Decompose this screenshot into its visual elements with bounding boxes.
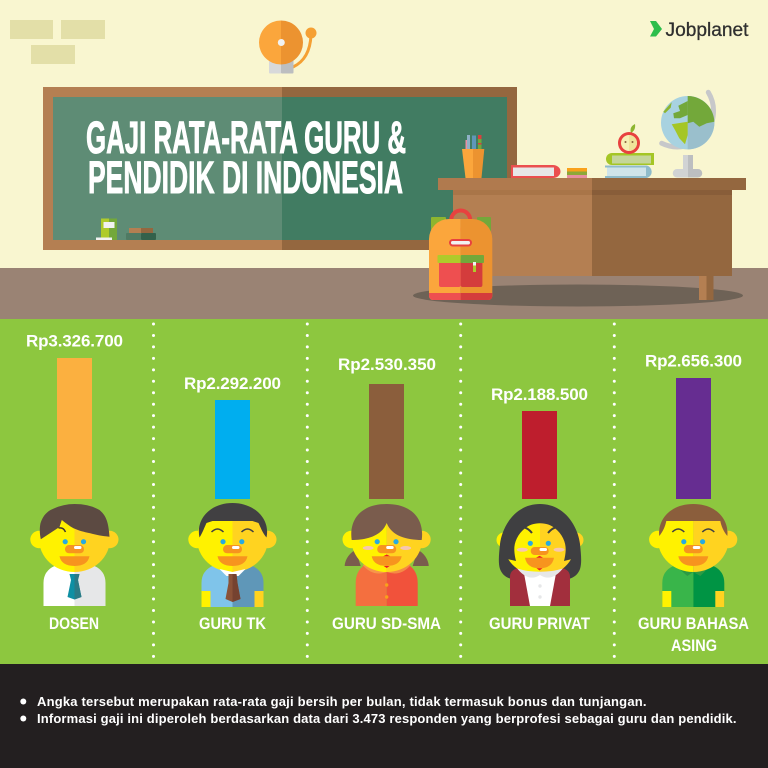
salary value: Rp3.326.700 [26,332,123,351]
salary value: Rp2.530.350 [338,355,436,374]
icon: school bell [259,20,316,74]
icon: chalk box [96,218,117,240]
bullet list: Informasi gaji ini diperoleh berdasarkan data dari 3.473 responden yang berprofesi sebagai guru dan pendidik. [37,711,736,726]
classroom floor [0,268,768,319]
title: GAJI RATA-RATA GURU & [86,112,406,163]
desk [438,178,746,300]
icon: sticky notes [567,168,587,178]
job label [638,615,749,655]
salary value: Rp2.188.500 [491,385,588,404]
icon: backpack [429,210,492,300]
character: private tutor [496,504,584,606]
bullet list [20,694,737,726]
panel: footer notes [0,664,768,768]
character: language teacher [649,504,737,607]
character: lecturer [30,504,118,606]
column: Guru TK [184,374,281,633]
character: kindergarten teacher [188,503,276,607]
bar [57,358,92,499]
title: PENDIDIK DI INDONESIA [88,152,403,203]
salary value: Rp2.656.300 [645,352,742,371]
character: school teacher [342,504,431,606]
icon: red book [511,165,560,178]
job label: ASING [671,637,717,655]
panel: blackboard [43,87,517,250]
job label: GURU SD-SMA [332,615,441,633]
icon: apple [618,124,640,154]
wall bricks [10,20,105,64]
salary value: Rp2.292.200 [184,374,281,393]
logo: Jobplanet: Jobplanet [666,19,749,41]
bar [215,400,250,499]
panel: green salary section [0,319,768,664]
title [86,112,406,203]
dotted column dividers [154,324,614,658]
job label: GURU PRIVAT [489,615,590,633]
icon: pencil cup [462,135,484,178]
bar [522,411,557,499]
column: Guru Privat [489,385,590,633]
column: Dosen [26,332,123,633]
job label: GURU BAHASA [638,615,749,633]
bullet list: Angka tersebut merupakan rata-rata gaji bersih per bulan, tidak termasuk bonus dan tunjangan. [37,694,646,709]
bar [369,384,404,499]
icon: eraser [126,228,156,240]
job label: GURU TK [199,615,266,633]
job label: DOSEN [49,615,99,633]
icon: stacked books [605,153,654,178]
bar [676,378,711,499]
icon: globe [661,92,714,178]
floor shadow [413,284,743,306]
column: Guru Bahasa Asing [638,352,749,655]
column: Guru SD-SMA [332,355,441,633]
classroom wall background [0,0,768,268]
